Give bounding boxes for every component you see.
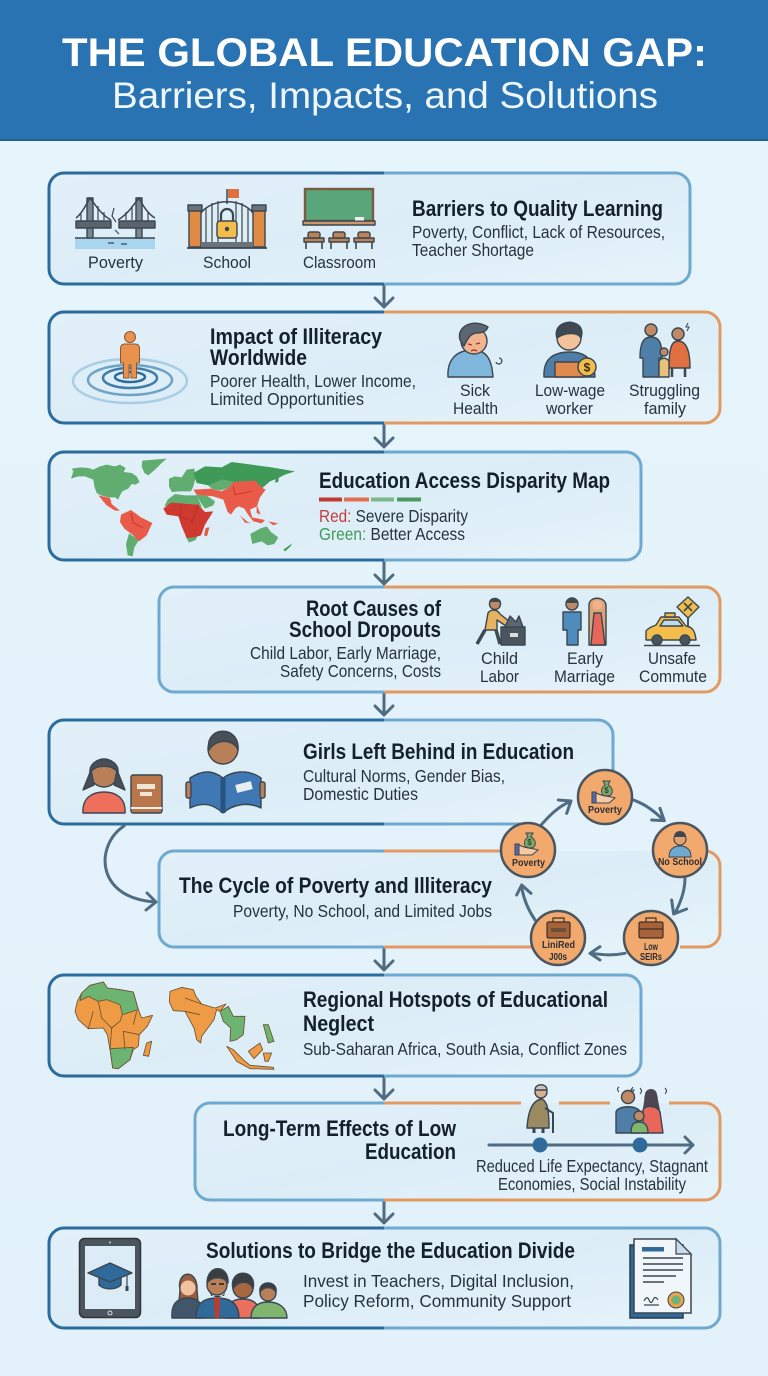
label: unsafe commute: Unsafe <box>648 649 696 668</box>
flow arrows between panels <box>375 285 393 1223</box>
label: child labor: Child <box>481 649 518 668</box>
description: Poorer Health, Lower Income, <box>210 371 416 391</box>
heading: Root Causes of <box>306 596 441 621</box>
heading <box>289 596 441 642</box>
description <box>303 1271 574 1311</box>
cycle arrows <box>517 800 687 960</box>
label: child labor <box>480 649 519 686</box>
description: Safety Concerns, Costs <box>280 661 441 681</box>
timeline arrow <box>489 1137 693 1153</box>
label: low-wage worker <box>535 381 605 418</box>
heading <box>210 324 382 370</box>
node: low skills: SEIRs <box>640 952 662 963</box>
panel: cycle of poverty <box>159 851 720 947</box>
icon: empty classroom <box>303 189 375 249</box>
node: limited jobs <box>531 911 585 965</box>
icon: distressed family <box>616 1087 666 1133</box>
icon: early marriage couple <box>563 598 606 645</box>
description: Limited Opportunities <box>210 389 364 409</box>
panel: solutions <box>49 1228 720 1328</box>
label: early marriage: Early <box>567 649 603 668</box>
label: unsafe commute <box>639 649 707 686</box>
arrow: girls to cycle <box>105 826 156 910</box>
icon: person in ripples <box>73 332 187 403</box>
icon: policy document <box>630 1239 691 1318</box>
icon: tablet with graduation cap <box>80 1238 140 1318</box>
header banner <box>0 0 768 141</box>
icon: locked school gate <box>187 189 267 248</box>
icon: broken bridge <box>75 198 155 249</box>
node: no school: No School <box>658 857 702 868</box>
regional maps <box>75 982 274 1069</box>
description: Poverty, No School, and Limited Jobs <box>233 901 492 921</box>
title: THE GLOBAL EDUCATION GAP: <box>62 31 707 75</box>
heading: Regional Hotspots of Educational <box>303 987 608 1012</box>
node: low skills: Low <box>644 942 658 953</box>
node: low skills <box>624 911 678 965</box>
label: school: School <box>203 253 251 272</box>
icon: unsafe commute <box>644 597 700 646</box>
node: poverty left: Poverty <box>512 858 545 869</box>
node: limited jobs: J00s <box>549 952 567 963</box>
label: poverty: Poverty <box>88 253 143 272</box>
label: low-wage worker: Low-wage <box>535 381 605 400</box>
label: sick health: Health <box>453 399 498 418</box>
description: Teacher Shortage <box>412 240 534 260</box>
icon: child labor <box>477 598 525 645</box>
panel: regional hotspots <box>49 975 641 1076</box>
label: classroom: Classroom <box>303 253 376 272</box>
label: unsafe commute: Commute <box>639 667 707 686</box>
node: poverty left <box>501 823 555 877</box>
heading: Neglect <box>303 1011 374 1036</box>
node: poverty top <box>578 770 632 824</box>
legend text: Green: Better Access <box>319 524 465 544</box>
heading <box>303 987 608 1036</box>
description: Domestic Duties <box>303 784 418 804</box>
subtitle: Barriers, Impacts, and Solutions <box>112 75 658 116</box>
heading: Long-Term Effects of Low <box>223 1116 456 1141</box>
legend text <box>319 506 468 544</box>
description <box>476 1156 708 1194</box>
heading: The Cycle of Poverty and Illiteracy <box>179 873 492 898</box>
description: Sub-Saharan Africa, South Asia, Conflict Zones <box>303 1039 627 1059</box>
heading: School Dropouts <box>289 617 441 642</box>
panel: long-term effects <box>195 1085 720 1200</box>
label: low-wage worker: worker <box>545 399 593 418</box>
description: Cultural Norms, Gender Bias, <box>303 766 505 786</box>
icon: elderly person <box>527 1085 553 1133</box>
label: sick health: Sick <box>460 381 490 400</box>
label: child labor: Labor <box>480 667 519 686</box>
world map <box>71 459 295 556</box>
icon: sick person <box>448 323 502 377</box>
heading: Impact of Illiteracy <box>210 324 382 349</box>
label: early marriage <box>554 649 615 686</box>
icon: community group <box>172 1269 287 1318</box>
icon: girl with book <box>83 759 162 813</box>
node: poverty top: Poverty <box>588 805 622 816</box>
panel: barriers to quality learning <box>49 173 690 284</box>
icon: struggling family <box>640 323 690 377</box>
description <box>412 222 665 260</box>
legend bar <box>319 498 421 502</box>
label: struggling family: family <box>644 399 686 418</box>
panel: root causes of dropouts <box>159 587 720 692</box>
icon: child reading book <box>186 731 265 813</box>
legend text: Red: Severe Disparity <box>319 506 468 526</box>
heading: Solutions to Bridge the Education Divide <box>206 1238 575 1263</box>
description <box>250 643 441 681</box>
icon: low-wage worker: $ <box>584 360 591 374</box>
cycle diagram <box>501 770 707 965</box>
label: struggling family <box>629 381 700 418</box>
panel: girls left behind <box>49 720 613 824</box>
label: sick health <box>453 381 498 418</box>
description <box>210 371 416 409</box>
heading: Worldwide <box>210 345 307 370</box>
panel: disparity map <box>49 452 641 560</box>
description <box>303 766 505 804</box>
description: Poverty, Conflict, Lack of Resources, <box>412 222 665 242</box>
heading: Girls Left Behind in Education <box>303 739 574 764</box>
icon: low-wage worker <box>544 322 596 377</box>
description: Invest in Teachers, Digital Inclusion, <box>303 1271 574 1291</box>
panel: impact of illiteracy <box>49 312 720 423</box>
label: early marriage: Marriage <box>554 667 615 686</box>
description: Economies, Social Instability <box>498 1174 686 1194</box>
heading: Barriers to Quality Learning <box>412 196 663 221</box>
node: limited jobs: LiniRed <box>542 940 575 951</box>
heading: Education Access Disparity Map <box>319 468 610 493</box>
heading <box>223 1116 456 1164</box>
description: Reduced Life Expectancy, Stagnant <box>476 1156 708 1176</box>
node: no school <box>653 823 707 877</box>
description: Policy Reform, Community Support <box>303 1291 571 1311</box>
label: struggling family: Struggling <box>629 381 700 400</box>
heading: Education <box>365 1139 456 1164</box>
description: Child Labor, Early Marriage, <box>250 643 441 663</box>
